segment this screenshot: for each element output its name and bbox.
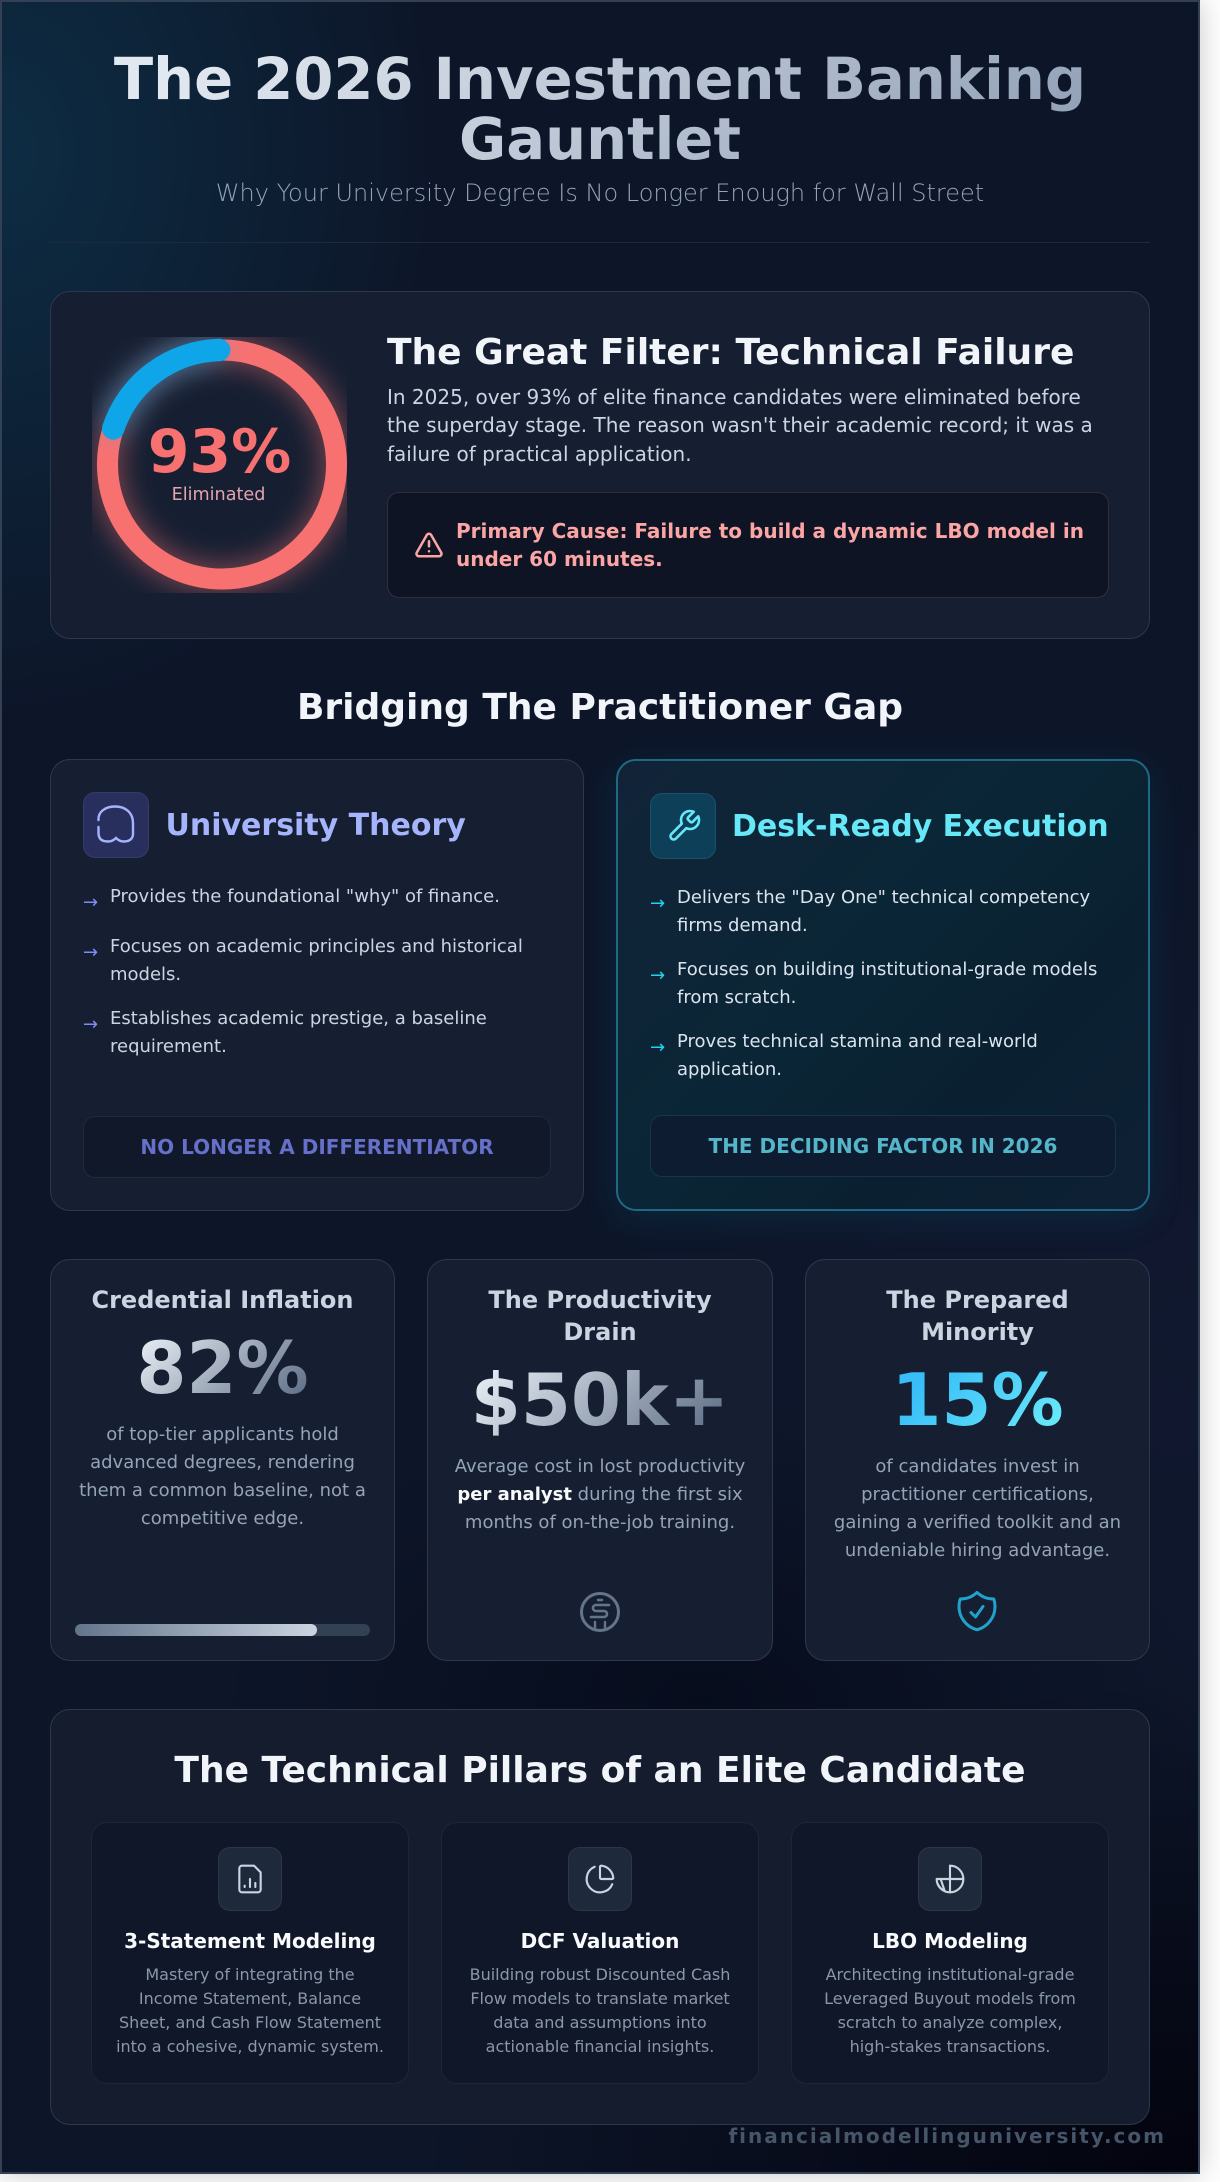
pillar description: Building robust Discounted Cash xyxy=(470,1965,730,1984)
stat value: 15% xyxy=(891,1358,1064,1442)
stat description: per analyst during the first six xyxy=(457,1484,743,1505)
pillar description xyxy=(824,1965,1076,2056)
bullet list: Provides the foundational "why" of finance. xyxy=(110,886,500,907)
bullet list: Focuses on academic principles and historical xyxy=(110,936,523,957)
bullet list: → xyxy=(650,1037,665,1058)
stat value: $50k+ xyxy=(471,1358,729,1442)
stat description xyxy=(455,1456,745,1533)
icon: shield check xyxy=(958,1590,996,1632)
pillar description: actionable financial insights. xyxy=(486,2037,714,2056)
pillar description: Leveraged Buyout models from xyxy=(824,1989,1076,2008)
pillar: dcf valuation xyxy=(441,1822,759,2084)
bullet list: Proves technical stamina and real-world xyxy=(677,1031,1038,1052)
pillar: lbo modeling xyxy=(791,1822,1109,2084)
stat card: prepared minority xyxy=(805,1259,1150,1661)
pillar: 3-statement modeling xyxy=(91,1822,409,2084)
stat description: advanced degrees, rendering xyxy=(90,1452,355,1473)
stat description: gaining a verified toolkit and an xyxy=(834,1512,1121,1533)
pillar title: LBO Modeling xyxy=(872,1929,1028,1953)
bullet list: → xyxy=(650,965,665,986)
heading: the great filter: The Great Filter: Technical Failure xyxy=(387,332,1074,373)
heading: bridging the practitioner gap: Bridging The Practitioner Gap xyxy=(297,687,903,728)
callout: primary cause xyxy=(387,492,1109,598)
icon: warning triangle xyxy=(415,532,443,558)
callout text: Primary Cause: Failure to build a dynamic LBO model in xyxy=(456,519,1084,543)
pillar description: Mastery of integrating the xyxy=(145,1965,355,1984)
stat description: of candidates invest in xyxy=(875,1456,1080,1477)
bullet 3 xyxy=(83,1008,487,1057)
bullet 1 xyxy=(650,887,1090,936)
donut chart: 93% eliminated xyxy=(92,337,347,593)
donut value: 93% xyxy=(148,417,291,487)
pillar description: Income Statement, Balance xyxy=(139,1989,361,2008)
bullet list: Delivers the "Day One" technical competency xyxy=(677,887,1090,908)
callout text xyxy=(456,519,1084,571)
badge: no longer a differentiator: NO LONGER A DIFFERENTIATOR xyxy=(140,1135,494,1159)
bullet list: → xyxy=(650,893,665,914)
paragraph: elimination explanation: the superday stage. The reason wasn't their academic record; it was a xyxy=(387,413,1093,437)
icon: wrench xyxy=(650,793,716,859)
pillar description: into a cohesive, dynamic system. xyxy=(116,2037,384,2056)
stat card: credential inflation xyxy=(50,1259,395,1661)
badge: the deciding factor: THE DECIDING FACTOR IN 2026 xyxy=(709,1134,1057,1158)
heading: technical pillars: The Technical Pillars of an Elite Candidate xyxy=(174,1750,1026,1791)
stat description: undeniable hiring advantage. xyxy=(845,1540,1110,1561)
bullet 2 xyxy=(83,936,523,985)
pillar description: Flow models to translate market xyxy=(470,1989,730,2008)
pillar description: Architecting institutional-grade xyxy=(826,1965,1074,1984)
stat description xyxy=(79,1424,366,1529)
pillar title: DCF Valuation xyxy=(521,1929,679,1953)
badge: no longer a differentiator xyxy=(83,1116,551,1178)
stat description: competitive edge. xyxy=(141,1508,304,1529)
bullet list: Establishes academic prestige, a baseline xyxy=(110,1008,487,1029)
bullet list xyxy=(650,887,1097,1080)
title: Gauntlet xyxy=(459,106,741,173)
bullet list xyxy=(83,886,523,1057)
pillar description: high-stakes transactions. xyxy=(850,2037,1050,2056)
paragraph: elimination explanation xyxy=(387,385,1093,466)
donut caption: Eliminated xyxy=(172,485,265,505)
bullet list: → xyxy=(83,892,98,913)
callout text: under 60 minutes. xyxy=(456,547,663,571)
stat description: them a common baseline, not a xyxy=(79,1480,366,1501)
icon: segmented pie xyxy=(918,1847,982,1911)
pillar description: Sheet, and Cash Flow Statement xyxy=(119,2013,381,2032)
stat description: of top-tier applicants hold xyxy=(106,1424,339,1445)
bullet list: application. xyxy=(677,1059,782,1080)
title: The 2026 Investment Banking xyxy=(114,46,1086,113)
stat value: 82% xyxy=(136,1326,309,1410)
pillar description xyxy=(470,1965,730,2056)
stat description: practitioner certifications, xyxy=(861,1484,1094,1505)
pillar title: 3-Statement Modeling xyxy=(124,1929,376,1953)
stat title: The Productivity xyxy=(488,1286,712,1314)
bullet list: from scratch. xyxy=(677,987,796,1008)
panel: university theory xyxy=(50,759,584,1211)
stat title: Drain xyxy=(563,1318,637,1346)
pillar description: data and assumptions into xyxy=(493,2013,707,2032)
stat description: months of on-the-job training. xyxy=(465,1512,735,1533)
title xyxy=(0,50,1200,182)
pillar description xyxy=(116,1965,384,2056)
stat title: The Prepared xyxy=(886,1286,1069,1314)
panel: technical pillars xyxy=(50,1709,1150,2125)
panel: the great filter xyxy=(50,291,1150,639)
watermark: financialmodellinguniversity.com xyxy=(728,2124,1166,2148)
bullet list: → xyxy=(83,1014,98,1035)
icon: brain outline xyxy=(83,792,149,858)
stat title xyxy=(886,1286,1069,1346)
stat title: Minority xyxy=(921,1318,1034,1346)
bullet list: firms demand. xyxy=(677,915,808,936)
bullet 1 xyxy=(83,886,500,913)
paragraph: elimination explanation: failure of practical application. xyxy=(387,442,692,466)
icon: file chart xyxy=(218,1847,282,1911)
progress bar: 82 percent xyxy=(75,1624,370,1636)
panel: desk-ready execution xyxy=(616,759,1150,1211)
icon: pie chart xyxy=(568,1847,632,1911)
badge: the deciding factor xyxy=(650,1115,1116,1177)
stat title xyxy=(488,1286,712,1346)
stat description xyxy=(834,1456,1121,1561)
card title: University Theory xyxy=(166,808,466,843)
stat title: Credential Inflation xyxy=(91,1286,354,1314)
bullet 2 xyxy=(650,959,1097,1008)
stat description: Average cost in lost productivity xyxy=(455,1456,745,1477)
bullet 3 xyxy=(650,1031,1038,1080)
bullet list: requirement. xyxy=(110,1036,227,1057)
bullet list: models. xyxy=(110,964,181,985)
pillar description: scratch to analyze complex, xyxy=(838,2013,1062,2032)
icon: dollar circle xyxy=(580,1592,620,1632)
paragraph: elimination explanation: In 2025, over 93% of elite finance candidates were eliminated before xyxy=(387,385,1081,409)
subtitle: Why Your University Degree Is No Longer Enough for Wall Street xyxy=(216,179,984,207)
bullet list: → xyxy=(83,942,98,963)
header: title and subtitle xyxy=(114,46,1086,207)
bullet list: Focuses on building institutional-grade models xyxy=(677,959,1097,980)
stat card: productivity drain xyxy=(427,1259,773,1661)
card title: Desk-Ready Execution xyxy=(732,809,1109,844)
